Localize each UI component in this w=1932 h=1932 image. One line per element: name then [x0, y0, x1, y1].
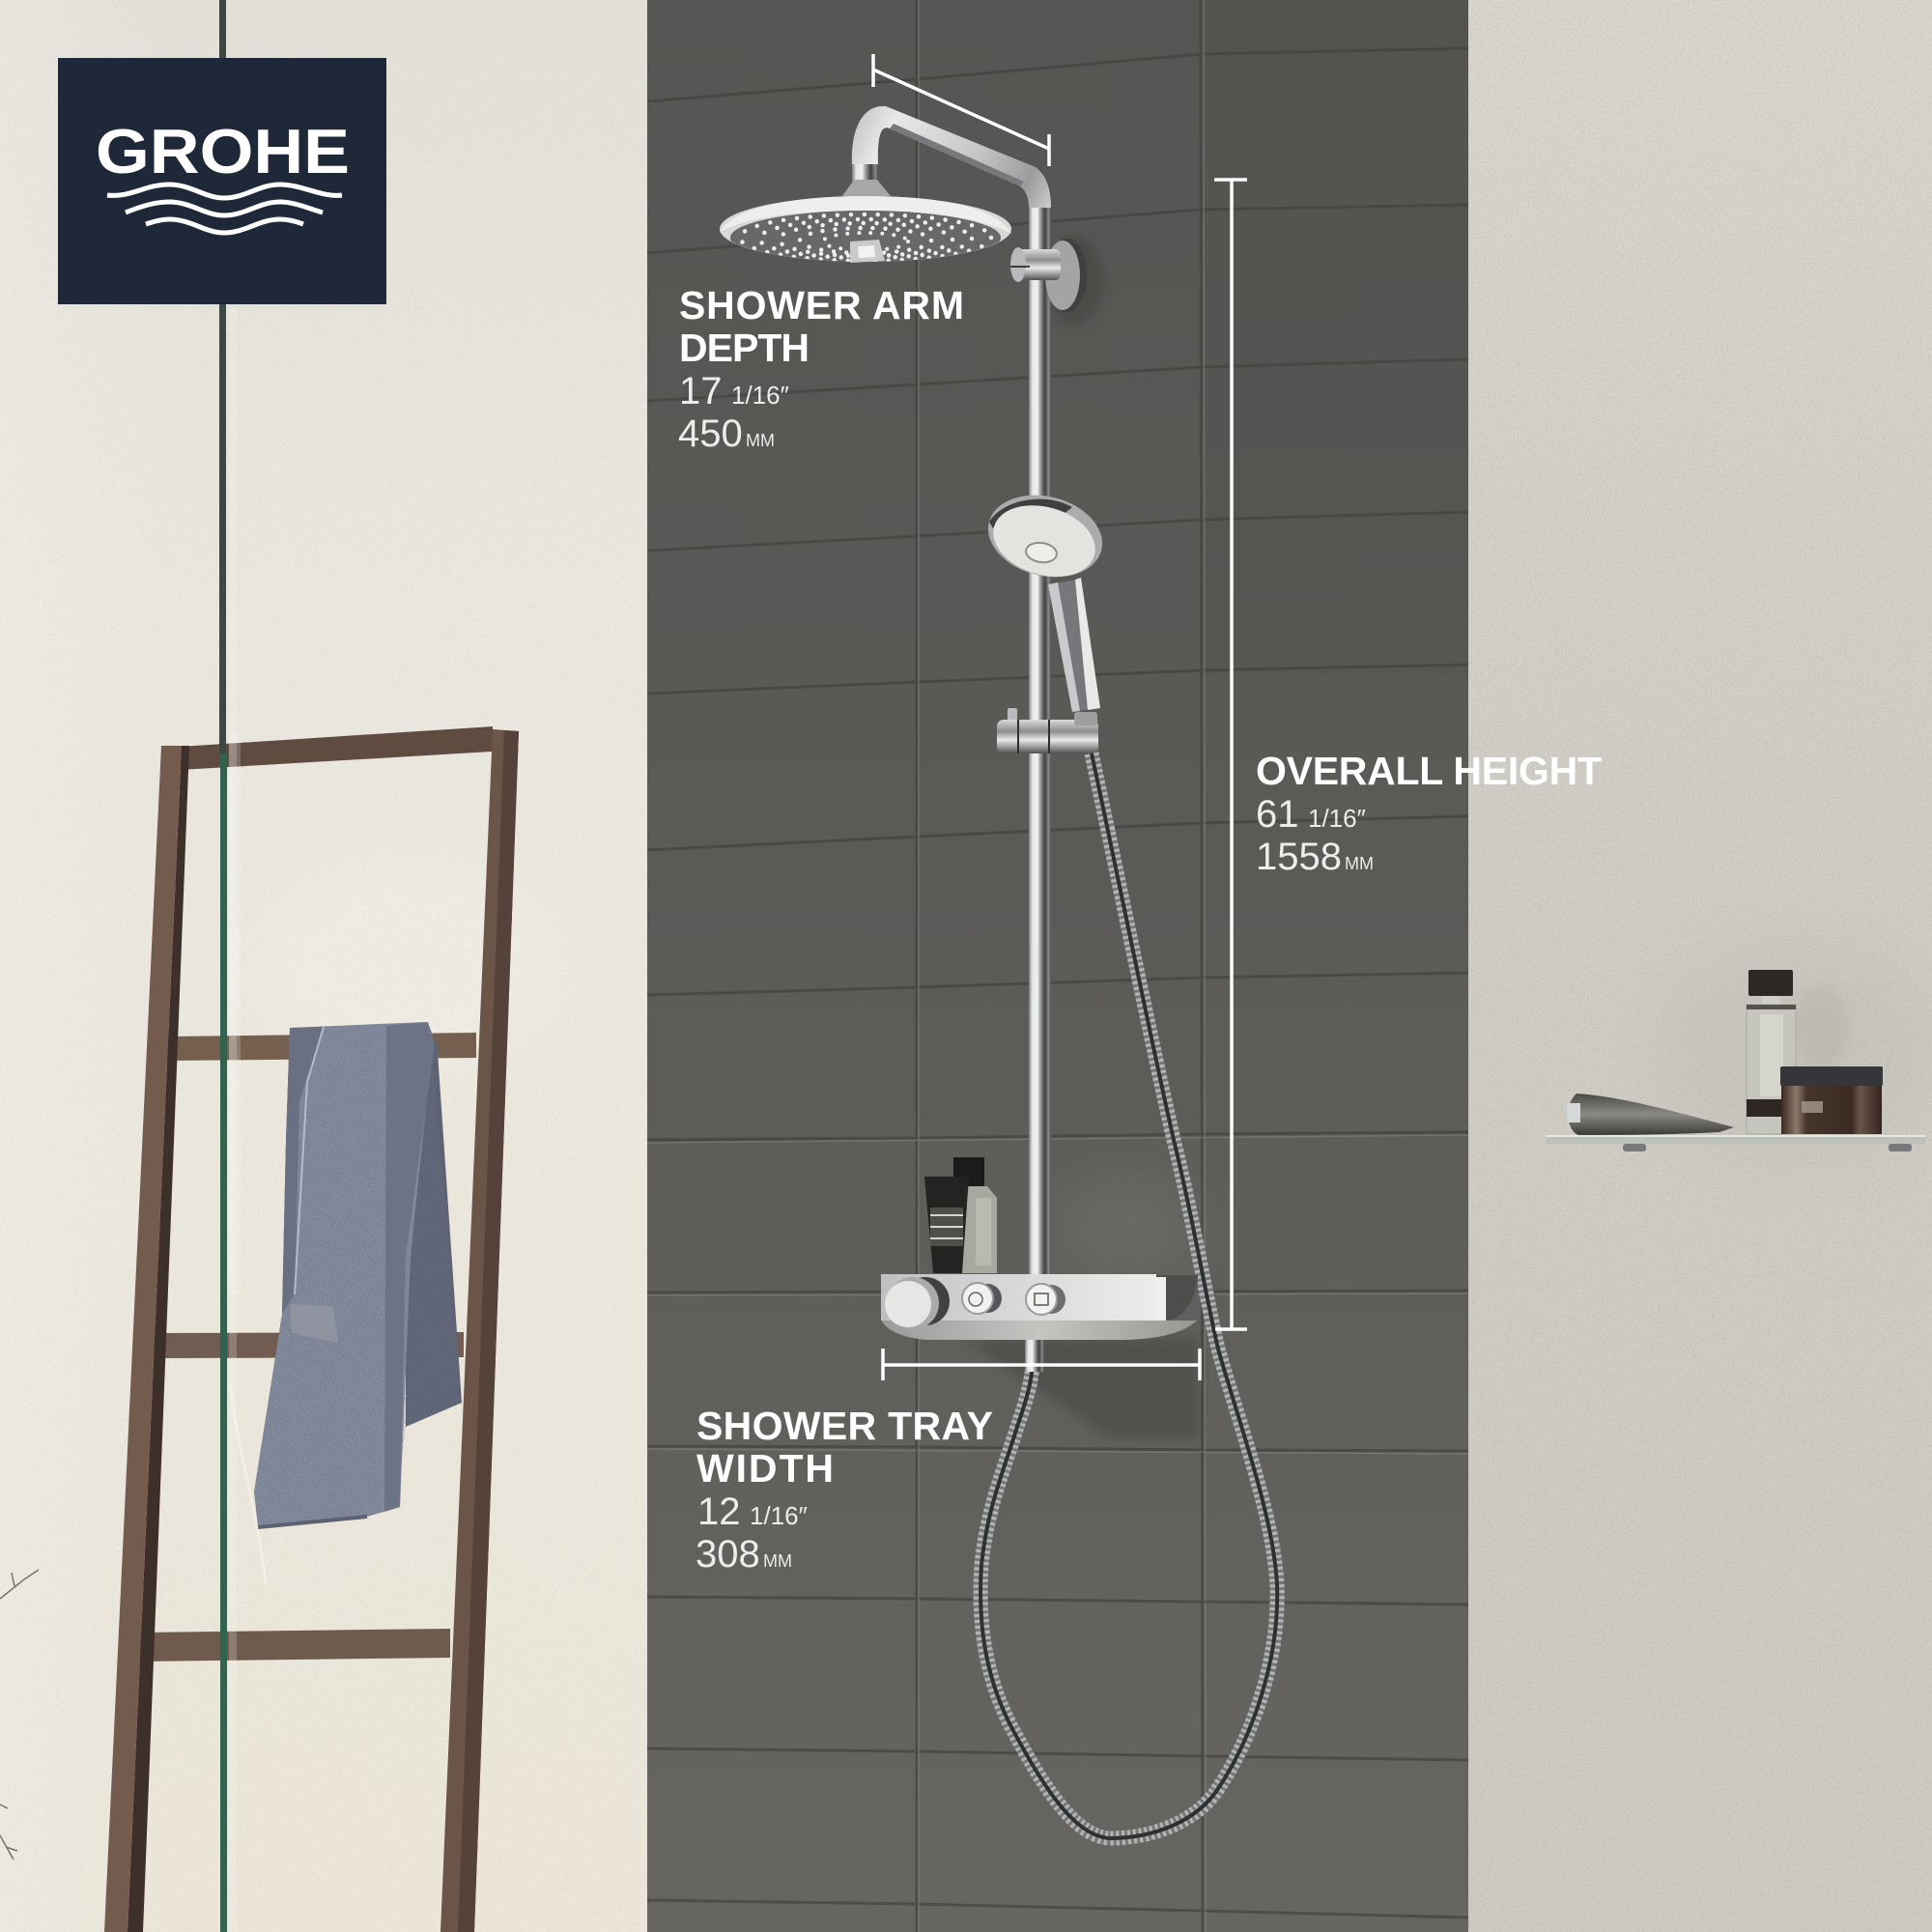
hand shower centre nozzle — [1025, 541, 1058, 564]
logo wordmark: GROHE — [96, 116, 350, 186]
rain shower head — [720, 164, 1011, 265]
label: shower tray width — [696, 1404, 993, 1576]
label: overall height: 1558 — [1256, 836, 1342, 878]
amber jar — [1780, 1066, 1883, 1134]
label: shower arm depth: 17 — [679, 370, 723, 412]
label: shower tray width: 12 — [697, 1491, 740, 1533]
head spray face — [730, 211, 1001, 265]
head mount — [842, 164, 891, 196]
label: shower arm depth: MM — [746, 431, 775, 450]
panel: right grey wall — [1466, 0, 1932, 1932]
icon: hanging blue towel — [246, 1019, 469, 1531]
label: overall height: 61 — [1256, 793, 1298, 836]
shower rail — [1029, 193, 1051, 1275]
button: hand shower — [1026, 1284, 1065, 1315]
ladder right post — [440, 729, 519, 1932]
bottles on tray — [924, 1157, 997, 1273]
dimension line: shower arm depth — [873, 54, 1049, 166]
shelf glass — [1546, 1135, 1925, 1151]
label: overall height: 1/16″ — [1308, 804, 1366, 833]
ladder rungs — [138, 726, 493, 1662]
metal shower hose — [980, 753, 1277, 1838]
dark tube — [924, 1177, 969, 1273]
label: shower arm depth: DEPTH — [679, 326, 810, 370]
panel: left cream wall — [0, 0, 649, 1932]
label: overall height — [1256, 749, 1602, 878]
hand shower — [980, 484, 1111, 712]
metal tube — [1567, 1094, 1734, 1135]
glass shower door edge — [219, 0, 266, 1932]
shower tray with controls — [881, 1274, 1198, 1340]
label: shower tray width: MM — [763, 1551, 792, 1571]
hose connector under tray — [1025, 1337, 1044, 1372]
ladder — [104, 726, 519, 1932]
label: overall height: MM — [1345, 854, 1374, 873]
jar shadow — [1792, 985, 1850, 1072]
clear bottle — [953, 1157, 997, 1273]
ladder left post — [104, 746, 189, 1932]
label: overall height: OVERALL HEIGHT — [1256, 749, 1602, 793]
hand shower handle — [1048, 578, 1100, 712]
label: shower arm depth: 450 — [678, 412, 743, 455]
label: shower arm depth — [678, 283, 964, 455]
wall bracket — [1010, 239, 1087, 312]
label: shower arm depth: SHOWER ARM — [679, 283, 964, 327]
label: shower tray width: 1/16″ — [750, 1501, 808, 1530]
label: shower tray width: 308 — [696, 1533, 760, 1576]
button: head shower — [962, 1283, 1002, 1314]
shower arm — [852, 106, 1051, 208]
label: shower tray width: SHOWER TRAY — [696, 1404, 993, 1448]
dimension line: shower tray width — [883, 1349, 1200, 1380]
dimension line: overall height — [1214, 180, 1247, 1329]
bottle — [1747, 970, 1796, 1134]
logo: GROHE — [58, 58, 386, 304]
main temperature knob — [885, 1277, 950, 1329]
icon: logo water waves — [107, 185, 342, 233]
label: shower tray width: WIDTH — [696, 1446, 834, 1491]
plant twigs at left edge — [0, 1570, 39, 1860]
sliding rail holder — [997, 708, 1098, 753]
glass shelf with toiletries — [1546, 970, 1925, 1151]
label: shower arm depth: 1/16″ — [731, 381, 789, 410]
panel: dark tile column — [647, 0, 1468, 1932]
